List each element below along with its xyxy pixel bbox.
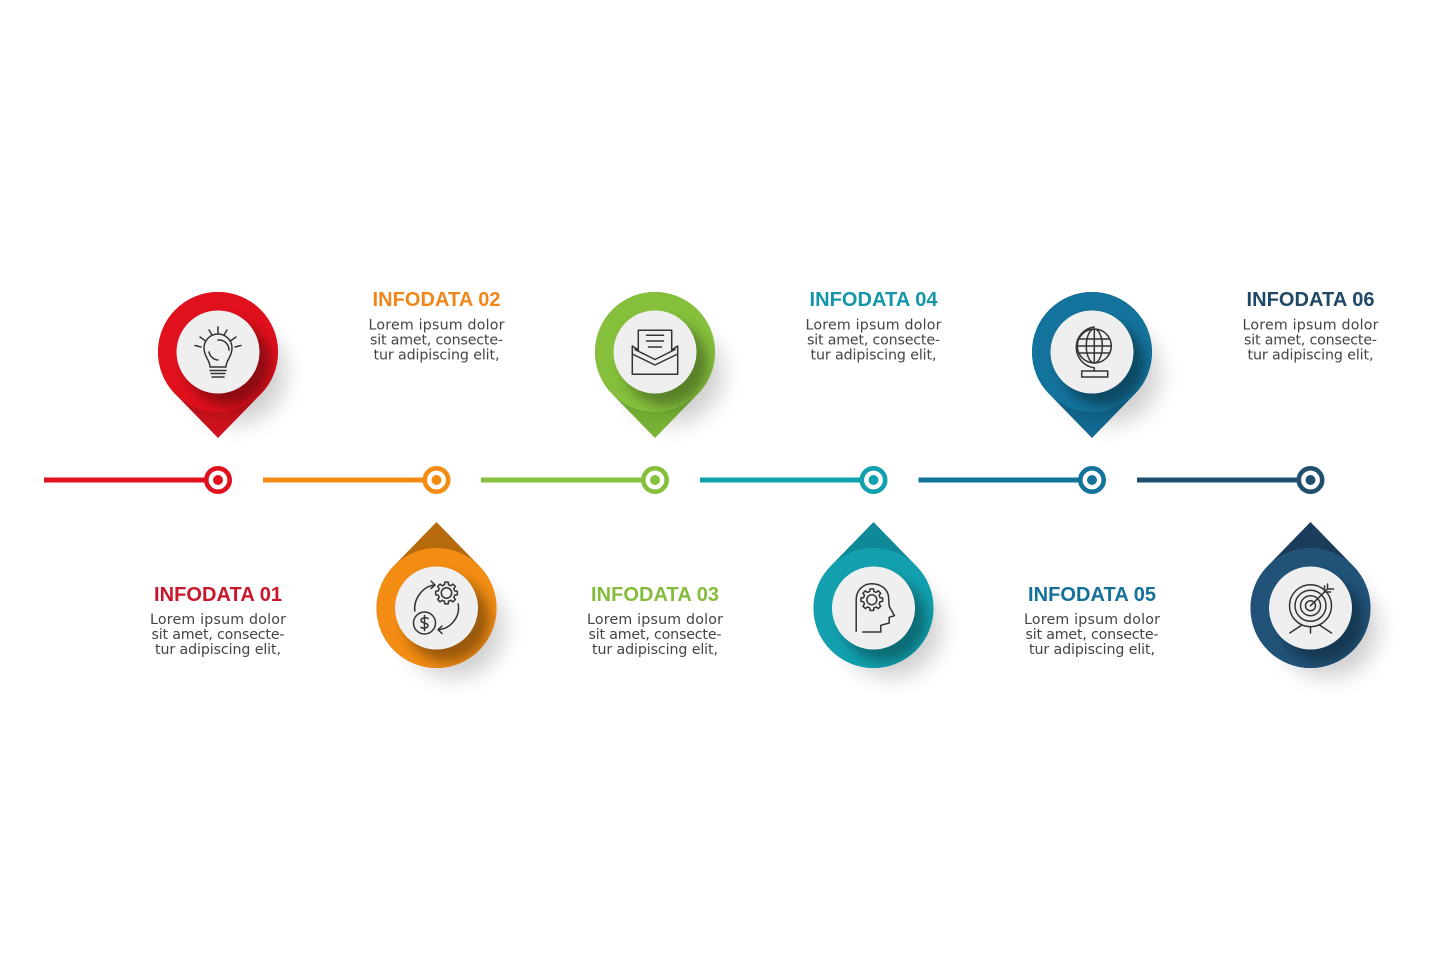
text block 04 [806, 318, 942, 364]
text block 03: tur adipiscing elit, [592, 642, 718, 658]
step 5: infodata 05 [918, 292, 1160, 658]
timeline segment 6 [1137, 468, 1322, 492]
heading 06: INFODATA 06 [1246, 289, 1374, 311]
text block 04: tur adipiscing elit, [810, 348, 936, 364]
icon: head with gear [856, 584, 894, 632]
icon: lightbulb [195, 327, 241, 377]
pin 3 with envelope [595, 292, 723, 438]
pin 5 with globe [1032, 292, 1160, 438]
step 2: infodata 02 [263, 289, 505, 678]
pin 4 with head and gear [814, 522, 942, 678]
heading 02: INFODATA 02 [372, 289, 500, 311]
text block 02: sit amet, consecte- [370, 332, 503, 348]
step 1: infodata 01 [44, 292, 286, 658]
text block 05 [1024, 612, 1160, 658]
text block 01: tur adipiscing elit, [155, 642, 281, 658]
timeline segment 3 [481, 468, 667, 492]
heading 04: INFODATA 04 [810, 289, 938, 311]
text block 05: Lorem ipsum dolor [1024, 612, 1160, 628]
icon: globe [1076, 327, 1111, 377]
icon: target with arrow [1290, 584, 1334, 633]
text block 06: sit amet, consecte- [1244, 332, 1377, 348]
text block 01: Lorem ipsum dolor [150, 612, 286, 628]
icon: envelope with letter [632, 330, 678, 374]
text block 02: Lorem ipsum dolor [368, 318, 505, 334]
timeline segment 5 [918, 468, 1104, 492]
text block 01 [150, 612, 286, 658]
text block 04: Lorem ipsum dolor [806, 318, 942, 334]
heading 05: INFODATA 05 [1028, 584, 1156, 606]
pin 2 with gear and dollar cycle [376, 522, 504, 678]
pin 1 with lightbulb [158, 292, 286, 438]
text block 05: sit amet, consecte- [1026, 627, 1158, 643]
timeline segment 1 [44, 468, 230, 492]
text block 03: sit amet, consecte- [588, 627, 722, 643]
heading 01: INFODATA 01 [154, 584, 282, 606]
text block 03: Lorem ipsum dolor [587, 612, 723, 628]
pin 6 with target [1250, 522, 1378, 678]
step 6: infodata 06 [1137, 289, 1379, 678]
text block 06: tur adipiscing elit, [1248, 348, 1374, 364]
step 4: infodata 04 [700, 289, 942, 678]
text block 02: tur adipiscing elit, [374, 348, 500, 364]
text block 04: sit amet, consecte- [807, 332, 940, 348]
timeline segment 4 [700, 468, 885, 492]
step 3: infodata 03 [481, 292, 723, 658]
text block 05: tur adipiscing elit, [1029, 642, 1155, 658]
text block 06: Lorem ipsum dolor [1242, 318, 1379, 334]
text block 02 [368, 318, 505, 364]
text block 06 [1242, 318, 1379, 364]
timeline segment 2 [263, 468, 448, 492]
heading 03: INFODATA 03 [591, 584, 719, 606]
text block 01: sit amet, consecte- [152, 627, 284, 643]
text block 03 [587, 612, 723, 658]
icon: gear and dollar [414, 581, 459, 634]
